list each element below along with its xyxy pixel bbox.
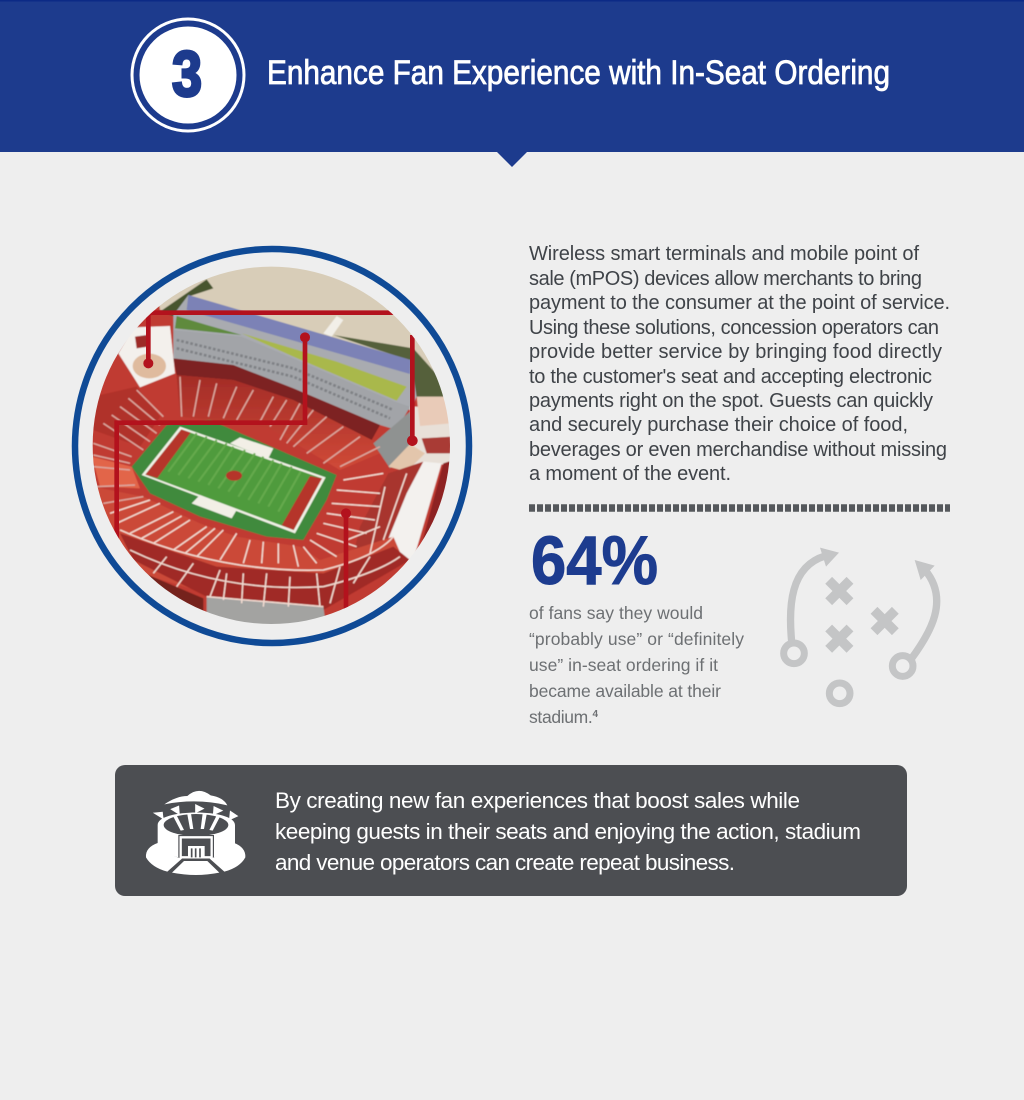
body paragraph: sale (mPOS) devices allow merchants to bring bbox=[529, 268, 922, 290]
statistic caption: became available at their bbox=[529, 681, 721, 701]
route markers bbox=[143, 332, 418, 518]
callout panel bbox=[115, 765, 907, 896]
header banner bbox=[0, 0, 1024, 167]
body paragraph: a moment of the event. bbox=[529, 463, 731, 485]
number badge: 3 bbox=[172, 38, 202, 110]
aerial stadium view bbox=[90, 263, 457, 630]
body paragraph: beverages or even merchandise without missing bbox=[529, 439, 947, 461]
body paragraph: provide better service by bringing food directly bbox=[529, 341, 942, 363]
statistic caption: use” in-seat ordering if it bbox=[529, 655, 718, 675]
statistic caption: stadium. bbox=[529, 707, 593, 727]
icon: stadium bbox=[146, 791, 245, 875]
body paragraph: payments right on the spot. Guests can quickly bbox=[529, 390, 933, 412]
callout text: and venue operators can create repeat business. bbox=[275, 850, 735, 875]
statistic caption bbox=[529, 603, 744, 727]
callout text: By creating new fan experiences that boost sales while bbox=[275, 788, 800, 813]
statistic caption: of fans say they would bbox=[529, 603, 703, 623]
circular ring bbox=[75, 249, 469, 643]
field surround bbox=[132, 420, 337, 540]
field bbox=[142, 427, 326, 533]
callout text bbox=[275, 788, 861, 875]
body paragraph: Using these solutions, concession operators can bbox=[529, 317, 939, 339]
body paragraph: to the customer's seat and accepting electronic bbox=[529, 366, 932, 388]
icon: football play diagram bbox=[784, 548, 937, 704]
statistic caption: “probably use” or “definitely bbox=[529, 629, 744, 649]
seating aisles bbox=[93, 377, 380, 503]
statistic: 64%: 64% bbox=[531, 522, 658, 599]
statistic caption: 4 bbox=[592, 709, 598, 720]
body paragraph bbox=[529, 243, 950, 485]
number badge bbox=[130, 18, 246, 132]
body paragraph: Wireless smart terminals and mobile point of bbox=[529, 243, 919, 265]
banner pointer bbox=[497, 152, 527, 167]
stadium illustration bbox=[75, 249, 469, 643]
body paragraph: and securely purchase their choice of food, bbox=[529, 414, 908, 436]
callout text: keeping guests in their seats and enjoying the action, stadium bbox=[275, 819, 861, 844]
body paragraph: payment to the consumer at the point of service. bbox=[529, 292, 950, 314]
service route lines bbox=[117, 313, 412, 610]
title: Enhance Fan Experience with In-Seat Ordering bbox=[267, 54, 890, 92]
